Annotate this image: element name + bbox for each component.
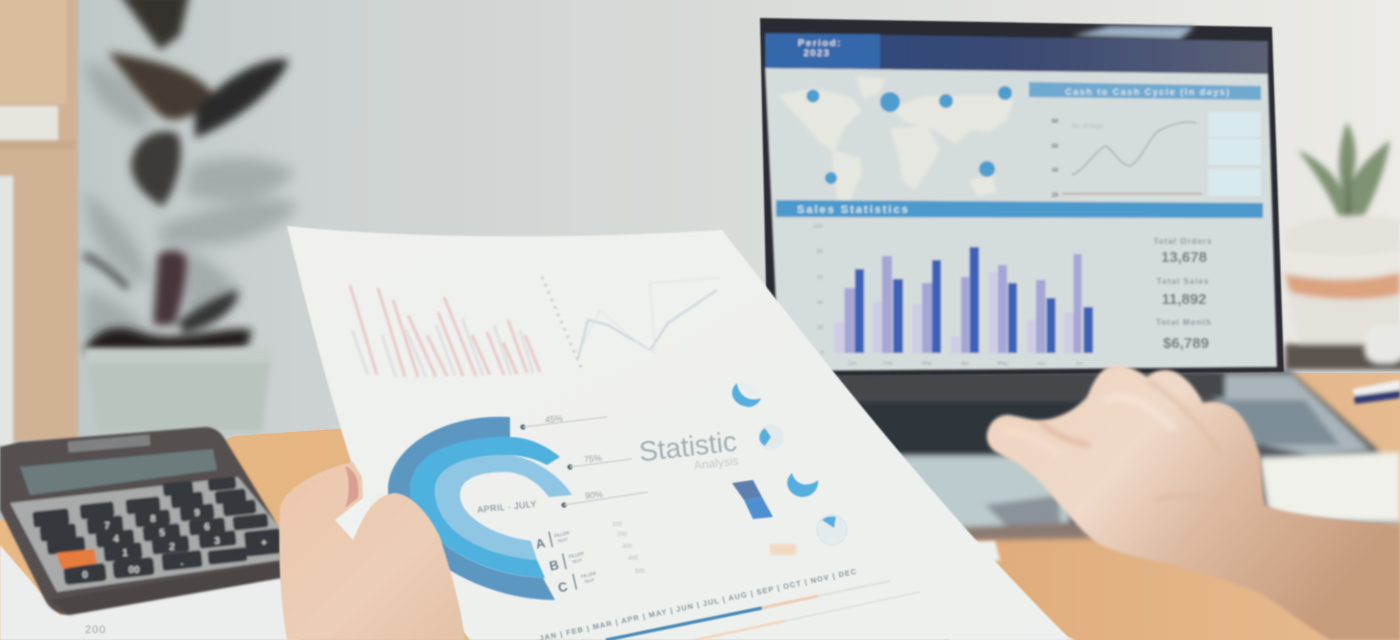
cash cycle line chart: 40 (1052, 168, 1059, 174)
map bubbles (806, 86, 1012, 184)
sales bar chart: May (998, 361, 1008, 367)
right hand typing on the laptop (987, 365, 1400, 640)
key digits: . (181, 557, 184, 568)
grey line chart (542, 277, 720, 370)
key digits: 7 (104, 521, 110, 532)
world map (778, 76, 1014, 204)
key digits: 3 (214, 536, 220, 547)
sales bar chart: 80 (817, 249, 823, 255)
laptop (760, 18, 1400, 541)
sales bar chart: Mar (922, 361, 932, 367)
sales totals (1154, 237, 1212, 352)
sales totals: Total Month (1156, 318, 1212, 327)
blue pen on the desk (1353, 380, 1400, 404)
blue stacked bar (732, 480, 773, 519)
axis minor labels: 200 (617, 532, 628, 538)
calculator (0, 427, 282, 615)
sales bar chart: Jan (848, 361, 856, 367)
key digits: 5 (159, 528, 165, 539)
cash cycle line chart: 20 (1052, 193, 1059, 199)
sales totals: 13,678 (1161, 249, 1207, 266)
sales totals: Total Sales (1157, 277, 1209, 286)
callout 75%: 75% (583, 453, 602, 465)
small pie charts (732, 382, 847, 545)
pink bar chart (350, 285, 540, 377)
wooden shelf on the left (0, 0, 78, 446)
printed report page (287, 226, 1067, 640)
donut centre label: APRIL · JULY (477, 499, 537, 515)
potted plant on the left (84, 0, 300, 432)
pie 2 (758, 424, 784, 450)
legend A B C: C (556, 579, 569, 595)
screen background (765, 68, 1277, 371)
key digits: 6 (204, 522, 210, 533)
sales bar chart: Feb (883, 361, 893, 367)
key digits: 2 (169, 542, 175, 553)
key digits: 9 (194, 508, 200, 519)
cash cycle heading: Cash to Cash Cycle (In days) (1065, 87, 1231, 97)
calculator keys (32, 477, 282, 585)
dashboard title bar (765, 33, 1268, 74)
gap of white paper between the left-hand fingers (333, 495, 378, 543)
laptop bezel (760, 18, 1284, 376)
legend A B C (534, 527, 600, 595)
cash cycle line chart: 80 (1052, 119, 1059, 125)
photo scene: analyst reviewing charts at a desk: 200 (85, 624, 106, 636)
laptop screen dashboard (765, 33, 1277, 371)
sales bar chart: 20 (817, 325, 823, 331)
sales bar chart: 100 (813, 224, 823, 230)
legend A B C: B (548, 557, 560, 574)
cash cycle line chart (1052, 119, 1202, 199)
small plant on the right (1285, 122, 1400, 370)
legend A B C: TEXT (572, 557, 583, 565)
left hand holding the report (279, 462, 465, 640)
sales bar chart: Apr (961, 361, 969, 367)
screen reflection (1072, 26, 1195, 40)
orange faint bar (770, 544, 796, 555)
percent callouts (520, 413, 648, 508)
legend boxes (1208, 112, 1261, 196)
knuckle shading (1000, 380, 1240, 515)
key digits: 4 (113, 534, 119, 545)
inner ring (435, 455, 572, 560)
sales statistics heading (776, 200, 1263, 218)
orange key (56, 549, 97, 569)
sales totals: 11,892 (1161, 291, 1207, 308)
key digits: 8 (150, 514, 156, 525)
sales totals: Total Orders (1154, 237, 1212, 246)
key digits: 1 (122, 548, 128, 559)
sales bar chart: Jun (1037, 361, 1045, 367)
period block: 2023 (804, 48, 830, 59)
cash cycle line chart: 60 (1052, 144, 1059, 150)
legend A B C: TEXT (584, 577, 595, 584)
pie 1 (732, 382, 761, 407)
callout 90%: 90% (585, 489, 603, 501)
white pot with orange band (1285, 215, 1400, 370)
sales bar chart: 40 (817, 300, 823, 306)
sales bar chart (813, 224, 1093, 367)
calculator display (20, 449, 217, 495)
sales statistics heading: Sales Statistics (797, 204, 910, 216)
calculator body (0, 427, 282, 615)
axis minor labels: 400 (628, 556, 639, 562)
legend A B C: FILLER (581, 571, 597, 579)
legend A B C: FILLER (554, 530, 571, 538)
white paper on the desk, bottom right (950, 585, 1075, 640)
axis minor labels: 500 (635, 569, 646, 575)
key digits: 00 (128, 565, 140, 576)
period block: Period: (798, 38, 842, 49)
cash cycle heading (1029, 82, 1261, 100)
sales bar chart: Jul (1075, 361, 1083, 367)
plant pot (85, 348, 272, 432)
outer ring (388, 417, 555, 600)
page sheet (287, 226, 1067, 640)
calculator face (10, 477, 280, 592)
axis minor labels: 100 (612, 522, 623, 528)
axis minor labels (612, 522, 646, 575)
sales bar chart: 60 (817, 275, 823, 281)
pie 4 (817, 515, 847, 545)
white paper on the desk, bottom left (0, 545, 300, 640)
key digits (82, 508, 267, 581)
statistic title: Analysis (693, 454, 739, 472)
white sheet under the laptop (925, 541, 1000, 570)
legend A B C: FILLER (568, 551, 585, 559)
donut chart (388, 417, 572, 600)
laptop base and keyboard (820, 370, 1400, 541)
callout 45%: 45% (545, 413, 563, 425)
statistic title: Statistic (637, 426, 738, 467)
cash cycle line chart: No. of Days (1072, 124, 1103, 130)
key digits: + (261, 538, 267, 549)
period block (765, 33, 880, 69)
middle ring (410, 437, 560, 578)
key digits: 0 (82, 570, 88, 581)
sales totals: $6,789 (1163, 335, 1209, 352)
wooden desk surface (0, 373, 1400, 640)
legend A B C: TEXT (557, 537, 569, 544)
legend A B C: A (534, 535, 547, 552)
pie 3 (787, 473, 818, 497)
axis minor labels: 300 (622, 544, 633, 550)
sales bar chart: 0 (820, 350, 824, 356)
